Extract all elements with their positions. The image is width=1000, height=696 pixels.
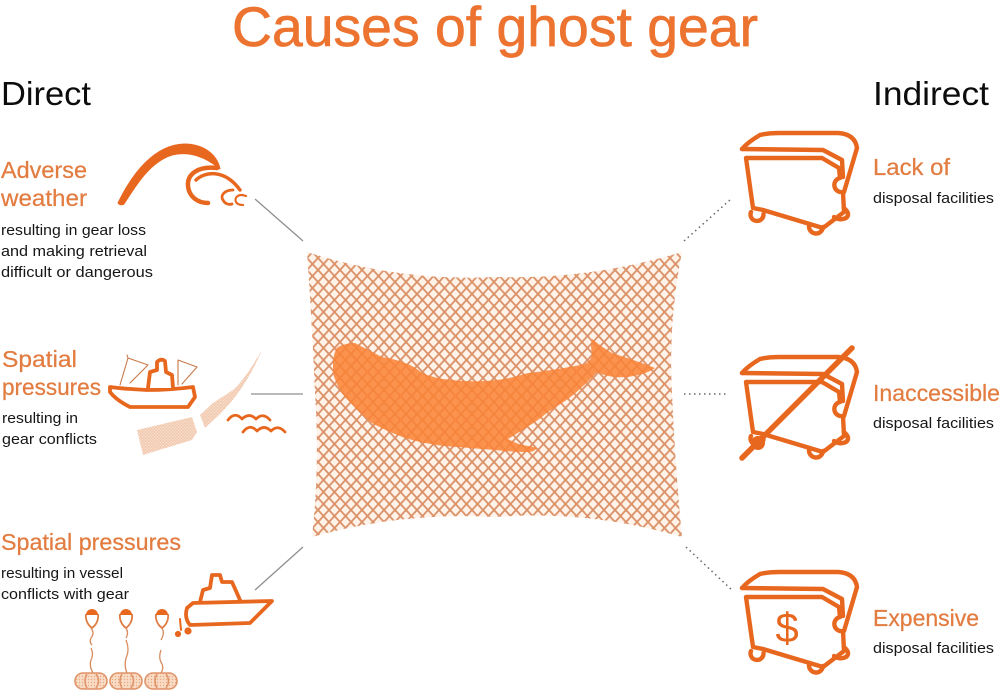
icon: water waves (228, 415, 285, 432)
icon: vessel with propeller (176, 575, 272, 636)
connector: inaccessible (684, 393, 727, 395)
text block: spatial pressures gear conflicts (2, 346, 101, 448)
heading: Indirect: Indirect (873, 75, 989, 112)
text block: vessel conflicts: Spatial pressures (1, 529, 181, 555)
text block: adverse weather: resulting in gear loss (1, 223, 146, 239)
text block: adverse weather: Adverse (1, 157, 87, 183)
text block: expensive: Expensive (873, 605, 979, 631)
text block: adverse weather (0, 157, 153, 281)
icon: crossed-out bin (742, 348, 857, 458)
icon: wave (118, 144, 246, 205)
net with whale (307, 252, 682, 537)
icon: torn net (137, 350, 262, 455)
icon: bin (742, 133, 857, 234)
text block: spatial pressures gear conflicts: gear conflicts (2, 432, 97, 448)
buoy 1 (86, 609, 98, 673)
text block: spatial pressures gear conflicts: Spatial (2, 346, 77, 372)
text block: expensive: disposal facilities (873, 641, 994, 657)
connector: adverse weather (255, 199, 303, 241)
text block: adverse weather: weather (0, 185, 87, 211)
text block: adverse weather: difficult or dangerous (1, 265, 153, 281)
text block: adverse weather: and making retrieval (1, 244, 147, 260)
icon: fishing vessel (110, 355, 197, 407)
text block: lack of (873, 154, 994, 207)
whale (333, 339, 655, 452)
connector: spatial pressures (251, 393, 303, 395)
icon: buoys and gear (75, 609, 177, 689)
text block: expensive (873, 605, 994, 657)
gear rolls (75, 673, 177, 689)
text block: vessel conflicts: resulting in vessel (1, 566, 123, 582)
text block: vessel conflicts (1, 529, 181, 603)
text block: lack of: Lack of (873, 154, 951, 180)
icon: bin with dollar (742, 572, 857, 673)
net (307, 252, 682, 537)
buoy 2 (120, 609, 132, 673)
text block: inaccessible: disposal facilities (873, 416, 994, 432)
connector: expensive (686, 547, 733, 591)
text block: spatial pressures gear conflicts: pressures (2, 374, 101, 400)
connector: lack of (684, 199, 731, 241)
text block: inaccessible (873, 380, 1000, 432)
text block: vessel conflicts: conflicts with gear (1, 587, 129, 603)
buoy 3 (156, 609, 168, 673)
text block: inaccessible: Inaccessible (873, 380, 1000, 406)
heading: Direct: Direct (1, 75, 91, 112)
text block: lack of: disposal facilities (873, 191, 994, 207)
connector: vessel (255, 547, 303, 590)
icon: bin with dollar: $ (775, 604, 799, 651)
text block: spatial pressures gear conflicts: resulting in (2, 411, 78, 427)
